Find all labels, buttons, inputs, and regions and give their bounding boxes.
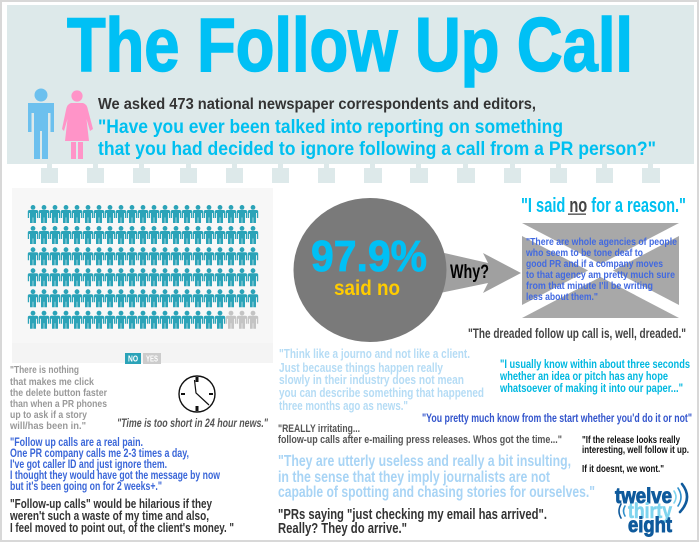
quote: really irritating: follow-up calls after e-mailing press releases. Whos got the time..."	[278, 434, 562, 446]
quote: just checking: Really? They do arrive."	[278, 520, 407, 537]
quote: real pain: but it's been going on for 2 weeks+."	[10, 481, 162, 493]
quote: think like a journo: Just because things happen really	[279, 361, 443, 375]
icon: clock	[179, 376, 215, 412]
quote: tone deaf: less about them."	[526, 291, 598, 303]
quote: real pain: I've got caller ID and just ignore them.	[10, 459, 167, 471]
quote: delete button: than when a PR phones	[10, 398, 107, 410]
quote: delete button: that makes me click	[10, 376, 94, 388]
survey question	[98, 117, 656, 160]
survey question: "Have you ever been talked into reporting on something	[98, 117, 563, 138]
quote: real pain: One PR company calls me 2-3 times a day,	[10, 448, 189, 460]
quote: hilarious: "Follow-up calls" would be hilarious if they	[10, 496, 213, 511]
quote: utterly useless: capable of spotting and chasing stories for ourselves."	[278, 484, 595, 501]
legend: no / yes	[125, 353, 161, 364]
quote: tone deaf: good PR and if a company moves	[526, 258, 663, 270]
arrow: why	[440, 252, 521, 293]
logo: twelve thirty eight: eight	[628, 514, 672, 537]
quote: think like a journo: three months ago as news."	[279, 399, 408, 413]
quote: three seconds	[499, 359, 690, 395]
stat circle: 97.9%	[311, 232, 427, 281]
quote: just checking	[278, 506, 547, 537]
quote: tone deaf: who seem to be tone deaf to	[525, 247, 643, 259]
quote: tone deaf: from that minute I'll be writing	[526, 280, 653, 292]
legend: no / yes: YES	[146, 354, 158, 364]
flag with quote	[522, 223, 679, 318]
quote: think like a journo: you can describe something that happened	[279, 386, 484, 400]
quote: hilarious	[9, 496, 234, 535]
panel: pictogram chart	[12, 188, 273, 364]
quote: utterly useless: "They are utterly useless and really a bit insulting,	[278, 453, 571, 470]
quote: if the release: If it doesnt, we wont."	[582, 464, 664, 475]
quote: delete button: "There is nothing	[10, 364, 79, 376]
quote: real pain	[10, 437, 220, 493]
quote: real pain: I thought they would have got the message by now	[10, 470, 220, 482]
quote: delete button	[9, 364, 107, 432]
survey question: that you had decided to ignore following a call from a PR person?"	[98, 139, 656, 160]
quote: delete button: will/has been in."	[9, 420, 86, 432]
logo: twelve thirty eight	[615, 484, 687, 537]
quote: hilarious: I feel moved to point out, of the client's money. "	[10, 520, 234, 535]
quote: think like a journo: "Think like a journo and not like a client.	[279, 347, 470, 361]
quote: real pain: "Follow up calls are a real pain.	[10, 437, 143, 449]
legend: no / yes: NO	[128, 354, 138, 364]
icon: woman	[62, 90, 93, 159]
quote: if the release	[582, 435, 689, 475]
quote: really irritating: "REALLY irritating...	[278, 423, 360, 435]
quote: just checking: "PRs saying "just checking my email has arrived".	[278, 506, 547, 523]
intro text: We asked 473 national newspaper correspondents and editors,	[98, 96, 536, 113]
quote: too short: "Time is too short in 24 hour news."	[117, 416, 268, 430]
stat circle: said no	[334, 277, 400, 300]
arrow: why: Why?	[450, 262, 489, 283]
quote: hilarious: weren't such a waste of my time and also,	[9, 508, 209, 523]
logo: twelve thirty eight: thirty	[628, 500, 672, 523]
quote: really irritating	[278, 423, 562, 446]
pictogram: 97.9% no, 2.1% yes	[28, 205, 258, 329]
panel: header	[7, 3, 694, 164]
hanging tags	[41, 164, 660, 183]
quote: think like a journo	[279, 347, 484, 413]
logo: twelve thirty eight: twelve	[615, 485, 672, 508]
stat circle	[294, 198, 446, 342]
quote: tone deaf	[525, 236, 677, 303]
quote: think like a journo: slowly in their industry does not mean	[279, 373, 464, 387]
quote: delete button: the delete button faster	[10, 387, 107, 399]
quote: tone deaf: to that agency am pretty much sure	[526, 269, 675, 281]
quote: utterly useless	[278, 453, 595, 501]
quote: utterly useless: in the sense that they imply journalists are not	[278, 469, 550, 486]
quote: delete button: up to ask if a story	[10, 409, 87, 421]
icon: man	[28, 88, 54, 159]
